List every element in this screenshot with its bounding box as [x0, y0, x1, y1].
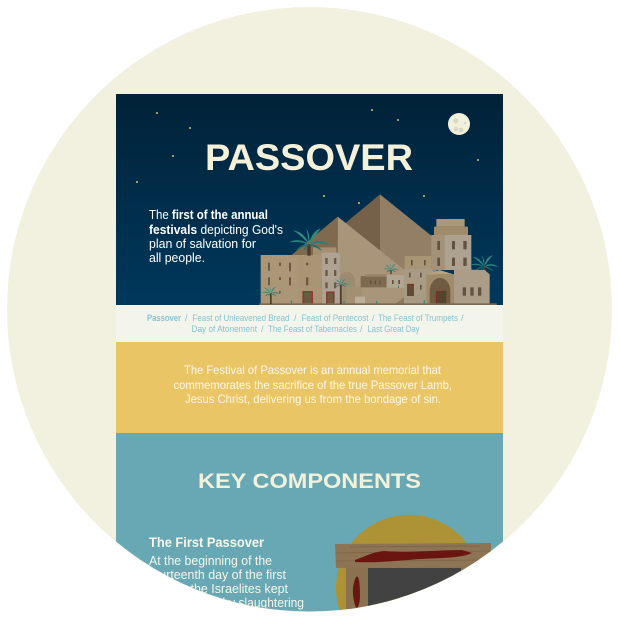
middle buildings: [340, 272, 404, 304]
panel: navigation: Passover: [147, 313, 181, 323]
illustration: pyramids and city: [259, 194, 499, 306]
panel: navigation: /: [360, 324, 363, 334]
heading: KEY COMPONENTS: [198, 470, 421, 493]
body text: the Passover by slaughtering: [149, 596, 304, 610]
panel: navigation: /: [294, 313, 297, 323]
panel: navigation: /: [261, 324, 264, 334]
intro text: all people.: [149, 251, 205, 265]
title: PASSOVER: [205, 137, 413, 178]
panel: navigation: The Feast of Tabernacles: [268, 324, 357, 334]
illustration: blood-marked doorframe: [335, 515, 491, 619]
right palm tree: [470, 255, 498, 272]
panel: summary band: Jesus Christ, delivering us from the bondage of sin.: [185, 392, 441, 406]
intro text: The first of the annual: [149, 208, 268, 222]
clipped page panel: [116, 94, 503, 619]
icon: moon: [448, 113, 470, 135]
stars: [136, 109, 479, 204]
left houses: [261, 247, 340, 304]
panel: night sky header: [116, 94, 503, 306]
small pyramid: [292, 217, 407, 305]
body text: fourteenth day of the first: [149, 568, 287, 582]
intro text: plan of salvation for: [149, 237, 256, 251]
panel: navigation: [116, 305, 503, 342]
body text: At the beginning of the: [149, 554, 272, 568]
panel: navigation: Last Great Day: [368, 324, 420, 334]
icon: palm trees: [262, 228, 425, 304]
big pyramid: [346, 194, 437, 274]
panel: key components: [116, 433, 503, 619]
panel: navigation: The Feast of Trumpets: [378, 313, 458, 323]
intro text: festivals depicting God's: [149, 223, 283, 237]
panel: summary band: [116, 342, 503, 433]
body text: month, the Israelites kept: [149, 582, 289, 596]
body text: [149, 554, 304, 610]
ground: [259, 303, 497, 305]
panel: summary band: commemorates the sacrifice of the true Passover Lamb,: [174, 378, 452, 392]
intro text: [149, 208, 283, 265]
panel: navigation: Feast of Unleavened Bread: [192, 313, 290, 323]
right buildings: [404, 219, 499, 304]
panel: navigation: /: [461, 313, 464, 323]
panel: navigation: /: [372, 313, 375, 323]
panel: navigation: Day of Atonement: [192, 324, 257, 334]
panel: summary band: The Festival of Passover is an annual memorial that: [184, 363, 442, 377]
subheading: The First Passover: [149, 534, 265, 550]
panel: navigation: /: [185, 313, 188, 323]
panel: navigation: Feast of Pentecost: [302, 313, 369, 323]
